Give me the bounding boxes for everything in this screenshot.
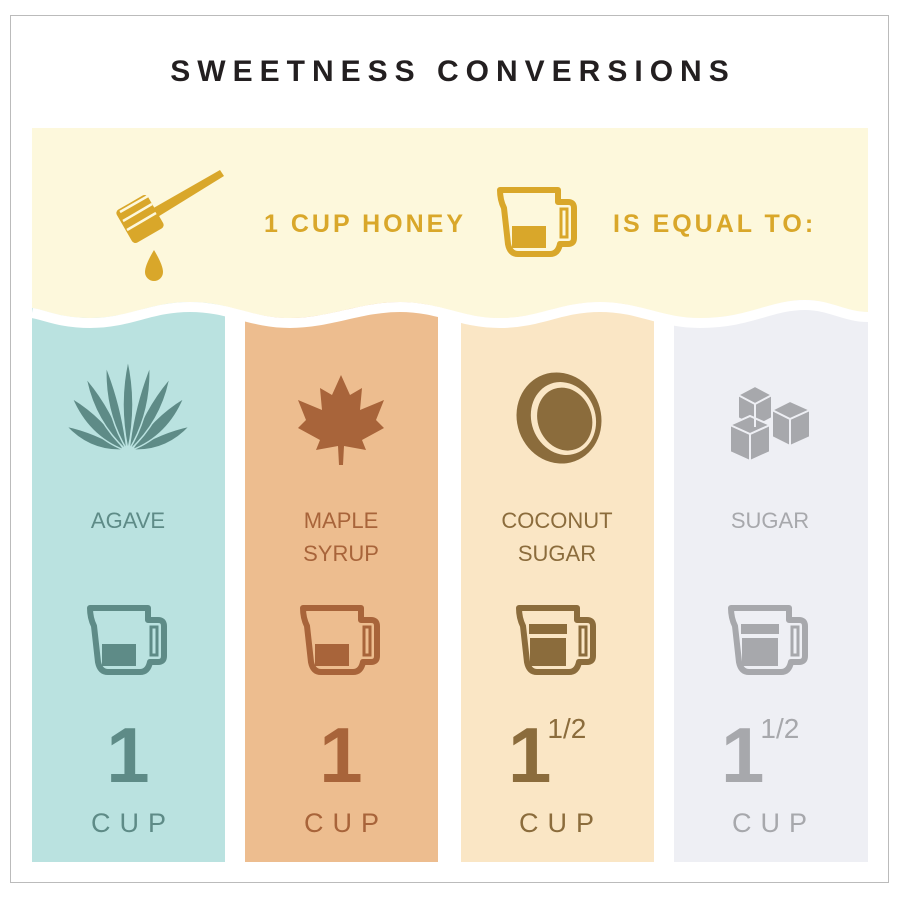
- heading: 1 cup honey: 1 CUP HONEY: [264, 210, 466, 238]
- amount: coconut: 1: [508, 711, 551, 799]
- heading: is equal to: IS EQUAL TO:: [613, 210, 816, 238]
- cup: coconut: [519, 608, 593, 672]
- amount: coconut: 1/2: [547, 713, 586, 744]
- amount: sugar: 1/2: [760, 713, 799, 744]
- amount: sugar: 1: [721, 711, 764, 799]
- column: sugar: [674, 290, 868, 862]
- unit: agave: CUP: [91, 808, 175, 838]
- cup: maple: [303, 608, 377, 672]
- label: agave: AGAVE: [91, 508, 165, 533]
- icon: maple leaf: [298, 375, 384, 465]
- label: maple syrup: SYRUP: [303, 541, 379, 566]
- unit: sugar: CUP: [732, 808, 816, 838]
- icon: agave: [66, 360, 190, 450]
- unit: coconut: CUP: [519, 808, 603, 838]
- amount: maple: 1: [319, 711, 363, 799]
- column: maple syrup: [245, 290, 438, 862]
- column: coconut sugar: [461, 290, 654, 862]
- icon: honey dipper: [115, 170, 224, 281]
- cup: agave: [90, 608, 164, 672]
- label: sugar: SUGAR: [731, 508, 809, 533]
- icon: coconut: [504, 360, 614, 476]
- cup: honey: [500, 190, 574, 254]
- label: coconut sugar: SUGAR: [518, 541, 596, 566]
- cup: sugar: [731, 608, 805, 672]
- unit: maple: CUP: [304, 808, 388, 838]
- label: maple syrup: MAPLE: [304, 508, 378, 533]
- honey banner: [32, 128, 868, 323]
- icon: sugar cubes: [730, 386, 810, 461]
- title: SWEETNESS CONVERSIONS: [170, 55, 736, 88]
- amount: agave: 1: [106, 711, 150, 799]
- column: agave: [32, 290, 225, 862]
- label: coconut sugar: COCONUT: [501, 508, 613, 533]
